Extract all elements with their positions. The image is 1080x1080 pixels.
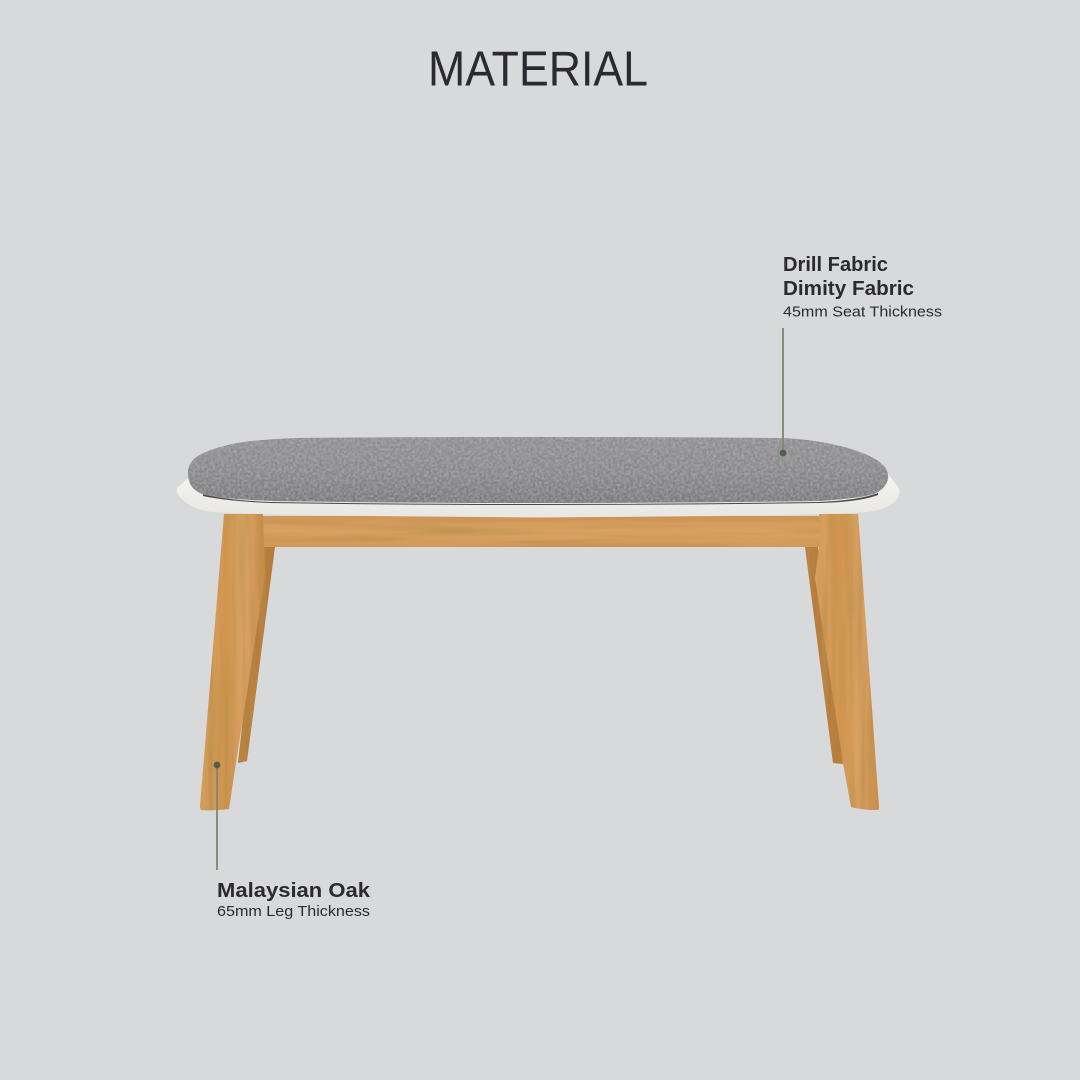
callout: seat fabric (780, 254, 942, 456)
marker dot: seat (780, 450, 786, 456)
label: drill fabric: Drill Fabric (783, 254, 888, 276)
leader line: leg (216, 766, 218, 870)
marker dot: leg (214, 762, 220, 768)
label: dimity fabric: Dimity Fabric (783, 278, 914, 300)
title: MATERIAL (428, 42, 648, 96)
grey cushion (188, 437, 888, 503)
label: seat thickness: 45mm Seat Thickness (783, 304, 942, 320)
label: malaysian oak: Malaysian Oak (217, 880, 371, 902)
stretcher rail (263, 516, 819, 547)
back left leg (238, 547, 275, 763)
callout: leg material (214, 762, 371, 920)
bench illustration (177, 437, 900, 810)
white seat board (177, 470, 900, 518)
front left leg (200, 514, 265, 810)
label: leg thickness: 65mm Leg Thickness (217, 903, 370, 920)
front right leg (815, 514, 879, 810)
leader line: seat (782, 328, 784, 452)
back right leg (805, 547, 843, 764)
cushion shadow (203, 493, 878, 505)
